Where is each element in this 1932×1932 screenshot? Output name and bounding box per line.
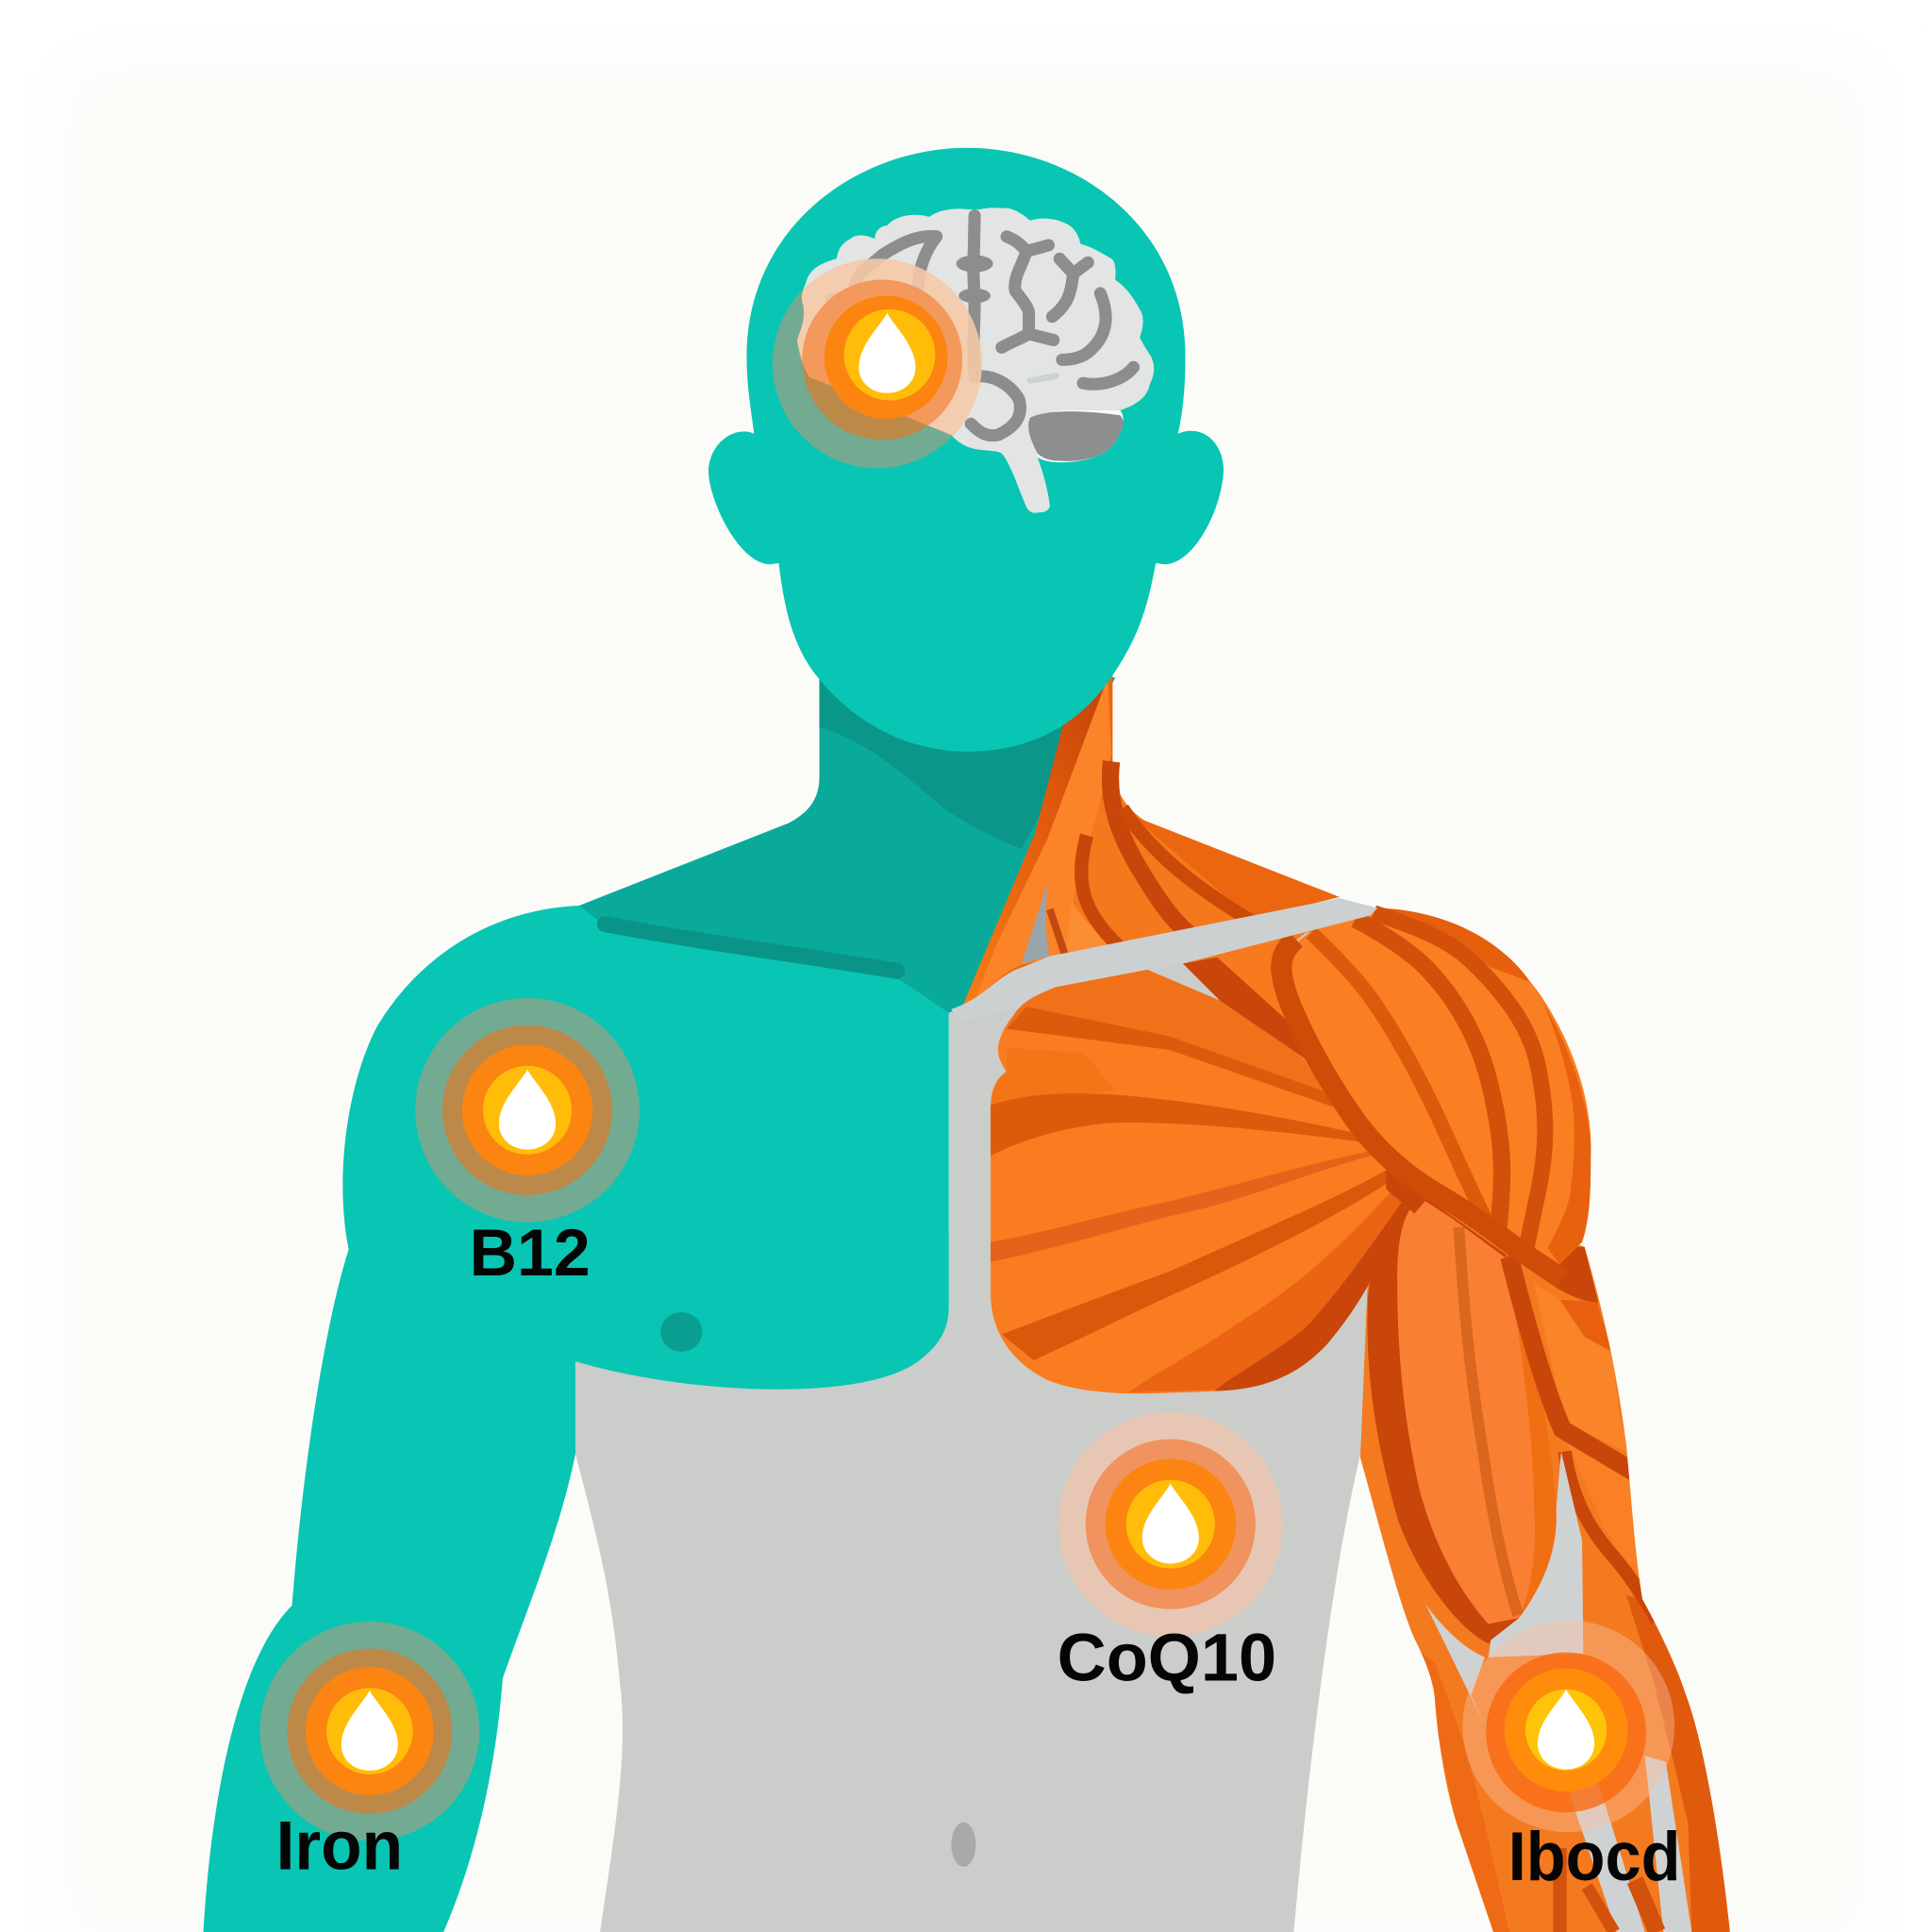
figure: human upper body [204, 148, 1750, 1932]
label: Ibocd: Ibocd [1508, 1819, 1681, 1895]
nipple [660, 1312, 702, 1352]
deltoid muscle [1183, 908, 1591, 1279]
label: Iron: Iron [276, 1807, 403, 1884]
forearm stripes [1560, 1848, 1657, 1932]
teal chest and arm [204, 906, 963, 1932]
label: CoQ10: CoQ10 [1058, 1621, 1276, 1696]
arm tendons [1509, 1257, 1639, 1474]
clavicle line [605, 924, 897, 971]
marker: iron [260, 1622, 479, 1840]
neck muscles [962, 673, 1340, 1007]
pectoral muscle [991, 970, 1436, 1393]
upper arm muscles [1356, 1171, 1750, 1932]
label: B12: B12 [470, 1215, 591, 1290]
biceps [1368, 1200, 1519, 1643]
head [708, 148, 1224, 752]
marker: CoQ10 [1058, 1412, 1283, 1637]
marker: B12 [415, 998, 640, 1223]
torso: grey exposed body [575, 898, 1417, 1932]
marker: brain [773, 258, 982, 468]
teal neck and upper chest [579, 653, 1115, 1013]
marker: blood [1462, 1621, 1674, 1832]
clavicle strip [951, 898, 1377, 1023]
navel [951, 1823, 975, 1867]
elbow tendons [1425, 1452, 1691, 1932]
brain [797, 208, 1154, 513]
neck shadow [820, 665, 1115, 849]
